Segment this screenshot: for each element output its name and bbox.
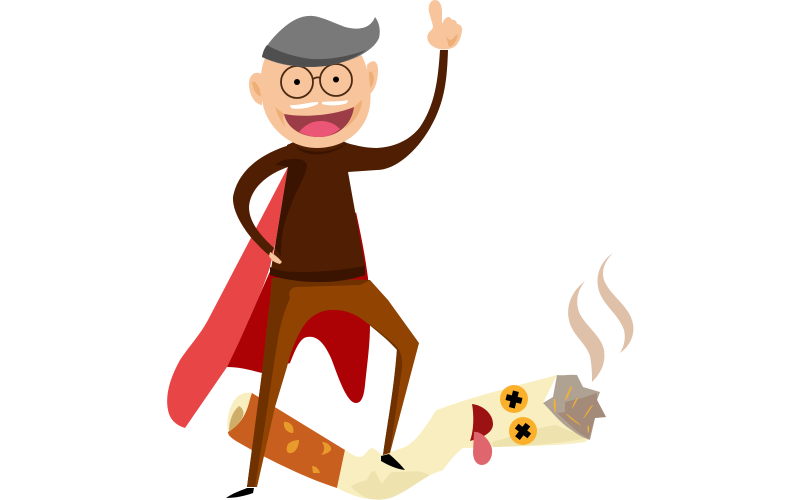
hair shading bbox=[262, 45, 366, 67]
cape bbox=[167, 167, 370, 428]
filter end bbox=[227, 393, 252, 432]
glasses bbox=[281, 64, 352, 98]
body shading bbox=[351, 425, 587, 500]
left ear bbox=[249, 73, 262, 105]
ash bbox=[543, 375, 606, 440]
cheek crease bbox=[275, 100, 362, 129]
cape: dark inner bbox=[227, 212, 370, 403]
sweater shading bbox=[270, 159, 365, 282]
trouser shading bbox=[247, 278, 370, 487]
cigarette bbox=[227, 375, 606, 500]
sweater: torso and raised arm bbox=[270, 50, 448, 282]
hand on hip bbox=[269, 252, 282, 264]
mustache bbox=[290, 100, 348, 109]
head bbox=[261, 49, 371, 148]
man bbox=[226, 0, 462, 498]
smoke bbox=[568, 253, 633, 382]
sweater: arm on hip bbox=[233, 145, 300, 256]
raised hand bbox=[427, 0, 462, 49]
cape: light outer bbox=[167, 167, 288, 428]
mouth bbox=[470, 404, 493, 441]
ember sparks bbox=[554, 386, 593, 434]
cigarette body bbox=[337, 375, 590, 500]
shoes bbox=[226, 488, 254, 498]
pupils bbox=[294, 76, 339, 85]
eye: upper bbox=[500, 385, 528, 413]
mouth bbox=[284, 107, 354, 137]
right ear bbox=[367, 61, 378, 95]
eye: lower bbox=[509, 417, 537, 445]
hair bbox=[262, 16, 380, 67]
cigarette filter bbox=[228, 393, 345, 488]
neck shadow bbox=[295, 143, 347, 155]
tongue bbox=[473, 432, 492, 465]
tongue bbox=[299, 121, 340, 137]
trousers bbox=[247, 278, 419, 487]
filter flecks bbox=[284, 422, 331, 473]
